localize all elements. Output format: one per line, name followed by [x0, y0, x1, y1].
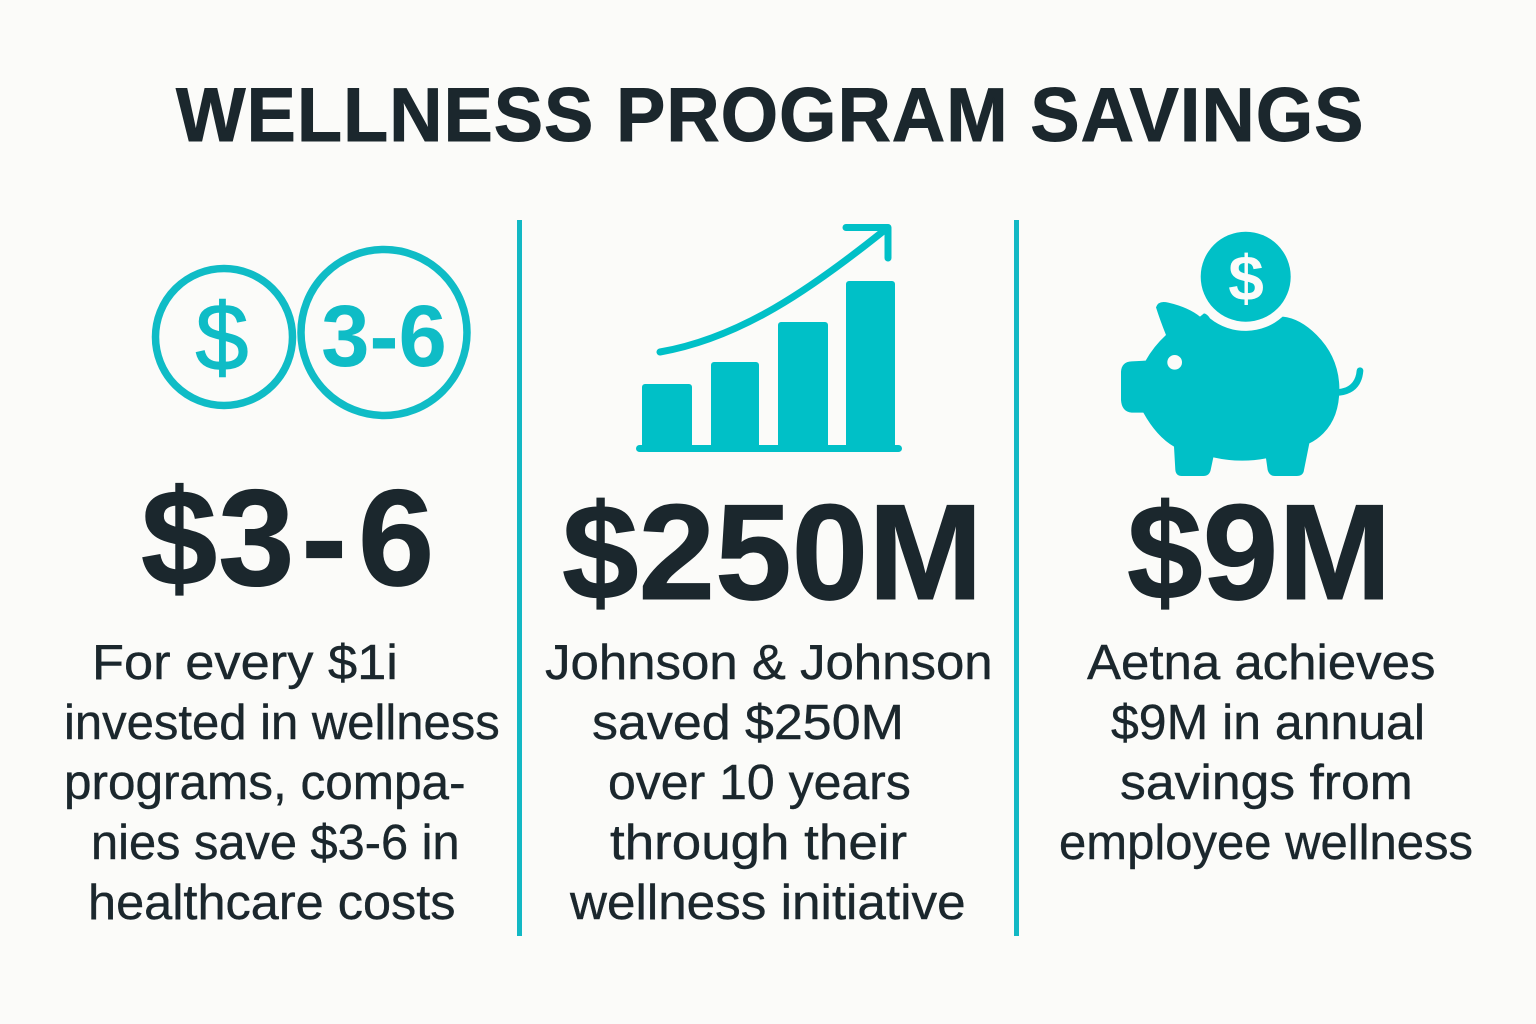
title: WELLNESS PROGRAM SAVINGS — [176, 73, 1365, 158]
text block: column 3 description: savings from — [1120, 756, 1413, 810]
icon: coin and ratio circles — [156, 250, 467, 416]
text block: column 2 description: over 10 years — [608, 756, 911, 810]
icon: piggy bank with coin — [1121, 232, 1360, 476]
text block: column 1 description: For every $1i — [92, 636, 398, 690]
text block: column 1 description: nies save $3-6 in — [91, 816, 460, 870]
text block: column 2 description: saved $250M — [592, 696, 904, 750]
text block: column 1 description: healthcare costs — [88, 876, 456, 930]
text block: column 3 description: $9M in annual — [1111, 696, 1425, 750]
text block: column 3 description: Aetna achieves — [1087, 636, 1435, 690]
stat: $9M: $9M — [1127, 476, 1392, 628]
text block: column 2 description: through their — [610, 816, 907, 870]
stat: $3-6: $3-6 — [141, 462, 435, 615]
text block: column 1 description — [64, 636, 500, 930]
icon: growth bar chart with arrow — [636, 228, 902, 452]
icon: piggy bank with coin: $ — [1228, 242, 1264, 314]
text block: column 1 description: programs, compa- — [64, 756, 466, 810]
stat: $250M: $250M — [562, 476, 983, 628]
text block: column 2 description: wellness initiative — [570, 876, 966, 930]
icon: coin and ratio circles: 3-6 — [321, 288, 447, 385]
text block: column 2 description: Johnson & Johnson — [545, 636, 993, 690]
text block: column 1 description: invested in wellness — [64, 696, 500, 750]
icon: coin and ratio circles: $ — [195, 284, 249, 391]
text block: column 3 description: employee wellness — [1059, 816, 1473, 870]
text block: column 3 description — [1059, 636, 1473, 870]
text block: column 2 description — [545, 636, 993, 930]
